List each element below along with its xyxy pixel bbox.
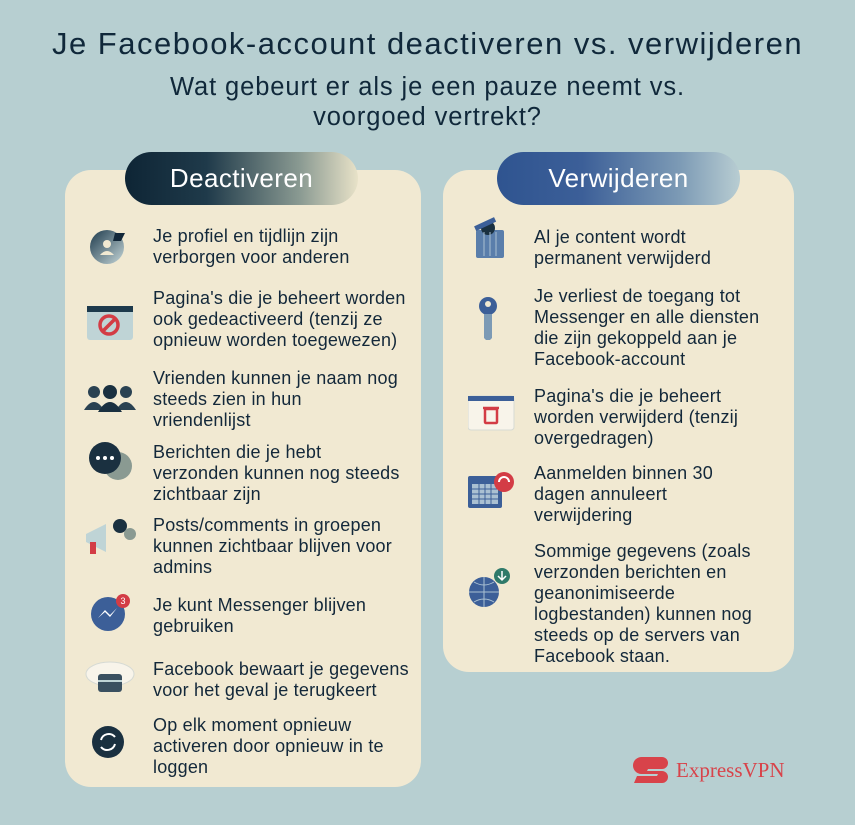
text 1 — [153, 226, 350, 267]
text 7: voor het geval je terugkeert — [153, 680, 377, 700]
pill: deactiveren — [125, 152, 358, 205]
panel: verwijderen — [443, 170, 794, 672]
text r5: logbestanden) kunnen nog — [534, 604, 752, 624]
text 5: kunnen zichtbaar blijven voor — [153, 536, 392, 556]
icon: trash — [474, 217, 504, 258]
text r5: Facebook staan. — [534, 646, 670, 666]
subtitle: Wat gebeurt er als je een pauze neemt vs. — [170, 73, 685, 101]
text r4: dagen annuleert — [534, 484, 667, 504]
logo: ExpressVPN: ExpressVPN — [676, 758, 784, 782]
icon: globe download — [469, 568, 510, 607]
text 5: admins — [153, 557, 212, 577]
title: Je Facebook-account deactiveren vs. verwijderen — [52, 26, 803, 61]
text r3 — [534, 386, 738, 448]
text 5: Posts/comments in groepen — [153, 515, 381, 535]
text 6: Je kunt Messenger blijven — [153, 595, 366, 615]
text r2: Je verliest de toegang tot — [534, 286, 740, 306]
text 2: ook gedeactiveerd (tenzij ze — [153, 309, 383, 329]
icon: messages — [89, 442, 132, 480]
text r2: Facebook-account — [534, 349, 685, 369]
text r3: worden verwijderd (tenzij — [534, 407, 738, 427]
text 3 — [153, 368, 398, 430]
pill: verwijderen: Verwijderen — [548, 163, 689, 193]
text 2 — [153, 288, 406, 350]
text 2: Pagina's die je beheert worden — [153, 288, 406, 308]
text 8: loggen — [153, 757, 208, 777]
text r2: die zijn gekoppeld aan je — [534, 328, 737, 348]
text 7: Facebook bewaart je gegevens — [153, 659, 409, 679]
text r5 — [534, 541, 752, 666]
icon: page delete — [468, 396, 514, 430]
text 4: zichtbaar zijn — [153, 484, 261, 504]
icon: page blocked — [87, 306, 133, 340]
text 5 — [153, 515, 392, 577]
text r1: Al je content wordt — [534, 227, 686, 247]
icon: key — [479, 297, 497, 340]
text 2: opnieuw worden toegewezen) — [153, 330, 397, 350]
text 8 — [153, 715, 384, 777]
panel: deactiveren — [65, 170, 421, 787]
text 6: gebruiken — [153, 616, 234, 636]
text r4: verwijdering — [534, 505, 632, 525]
text 8: Op elk moment opnieuw — [153, 715, 351, 735]
text r3: overgedragen) — [534, 428, 654, 448]
text r2: Messenger en alle diensten — [534, 307, 759, 327]
subtitle: voorgoed vertrekt? — [313, 103, 542, 131]
logo: ExpressVPN — [633, 757, 784, 783]
text r1 — [534, 227, 711, 268]
icon: friends — [84, 385, 136, 412]
text r5: geanonimiseerde — [534, 583, 675, 603]
text r5: verzonden berichten en — [534, 562, 727, 582]
icon: megaphone — [86, 519, 136, 554]
text r5: steeds op de servers van — [534, 625, 740, 645]
text 1: verborgen voor anderen — [153, 247, 350, 267]
icon: cloud data — [86, 662, 134, 692]
text 3: vriendenlijst — [153, 410, 251, 430]
text 3: Vrienden kunnen je naam nog — [153, 368, 398, 388]
text 8: activeren door opnieuw in te — [153, 736, 384, 756]
icon: messenger: 3 — [120, 596, 126, 606]
icon: profile hidden — [90, 230, 125, 264]
text 4 — [153, 442, 400, 504]
text r3: Pagina's die je beheert — [534, 386, 721, 406]
icon: messenger — [91, 594, 130, 631]
text 4: verzonden kunnen nog steeds — [153, 463, 400, 483]
text 1: Je profiel en tijdlijn zijn — [153, 226, 338, 246]
text r2 — [534, 286, 759, 369]
text 3: steeds zien in hun — [153, 389, 302, 409]
pill: verwijderen — [497, 152, 740, 205]
icon: reactivate — [92, 726, 124, 758]
text 7 — [153, 659, 409, 700]
text r4 — [534, 463, 713, 525]
subtitle — [170, 73, 685, 131]
text r1: permanent verwijderd — [534, 248, 711, 268]
icon: calendar — [468, 472, 514, 508]
pill: deactiveren: Deactiveren — [170, 163, 313, 193]
text r5: Sommige gegevens (zoals — [534, 541, 751, 561]
text 6 — [153, 595, 366, 636]
text 4: Berichten die je hebt — [153, 442, 321, 462]
text r4: Aanmelden binnen 30 — [534, 463, 713, 483]
